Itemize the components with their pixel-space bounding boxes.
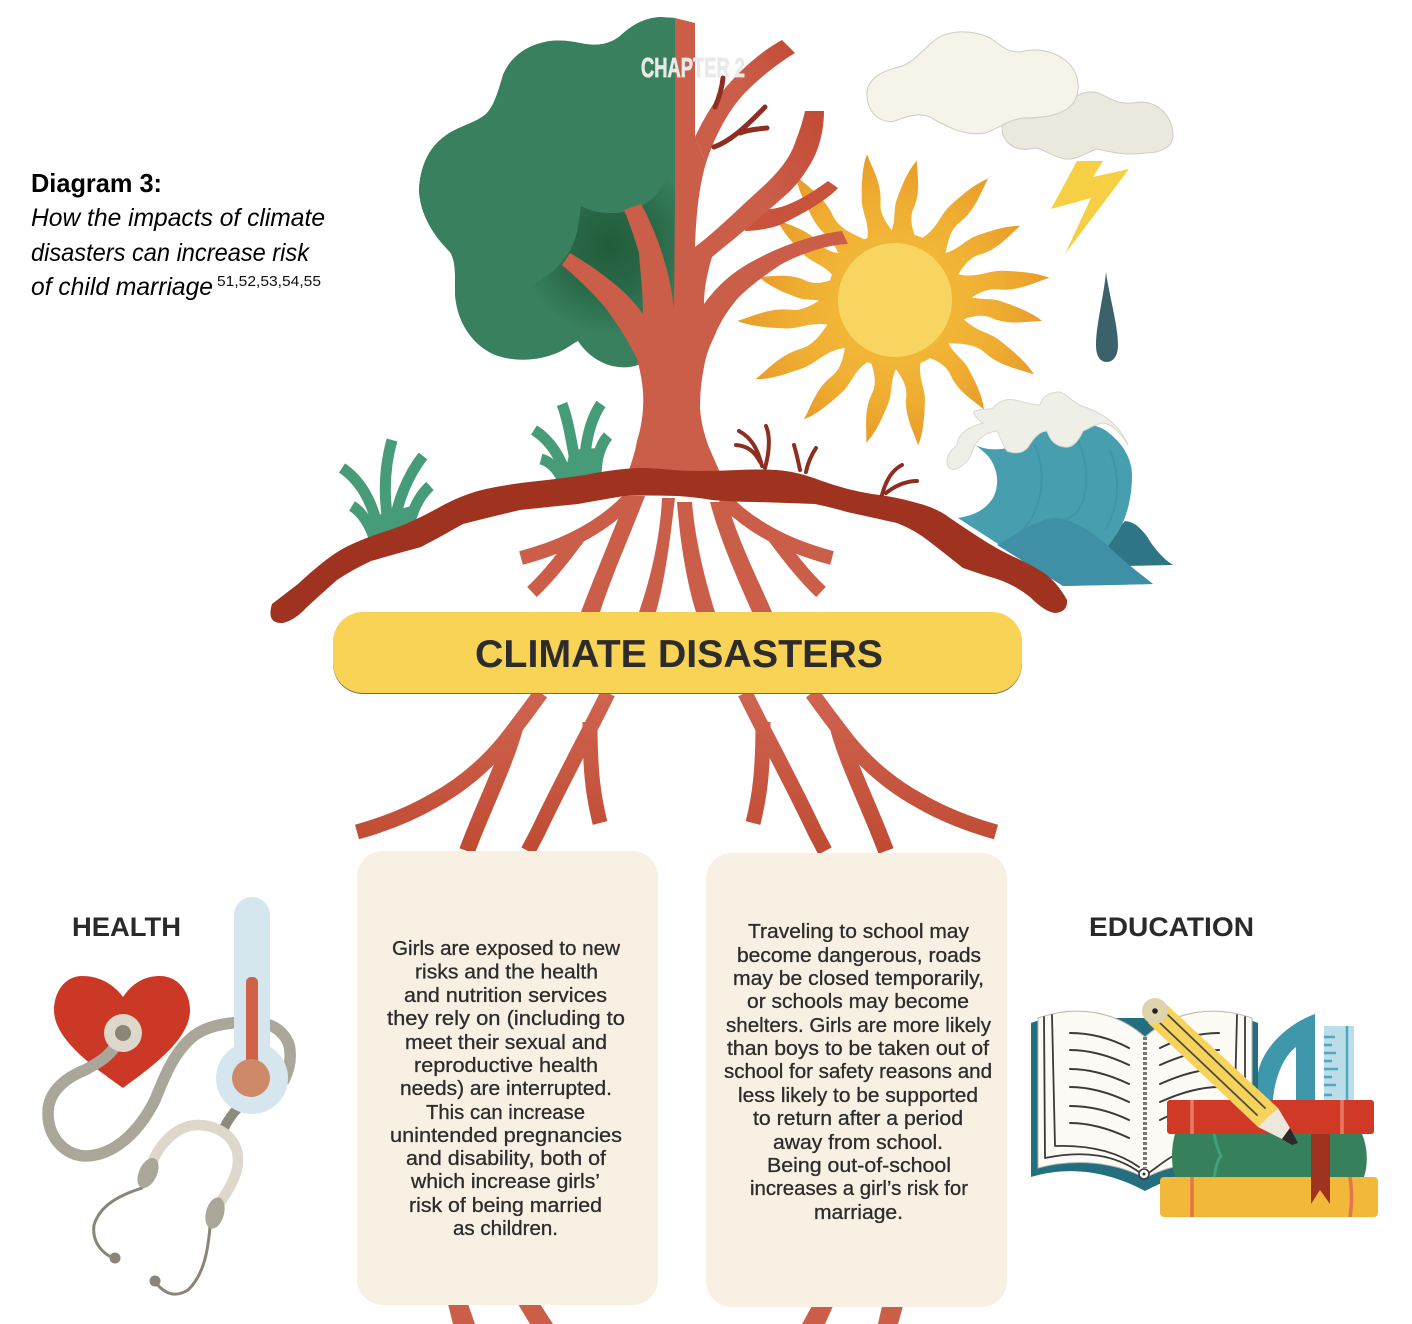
panel: education text: marriage. [814,1202,903,1224]
bottom root stubs [448,1304,903,1324]
rain drop [1096,272,1118,362]
icon: heart and stethoscope with thermometer [48,897,290,1294]
title block [31,168,325,301]
title block: Diagram 3: [31,168,162,198]
panel: health text: they rely on (including to [387,1008,625,1030]
title block: of child marriage [31,273,213,301]
chapter label: CHAPTER 2 [641,52,745,83]
panel: health text: unintended pregnancies [390,1125,622,1147]
panel: health text: This can increase [426,1102,585,1124]
panel: education text: to return after a period [753,1108,963,1130]
panel: health text: and disability, both of [406,1148,606,1170]
icon: books, pencil and geometry tools [1031,998,1378,1217]
panel: education text: shelters. Girls are more likely [726,1015,991,1037]
panel: health text: risks and the health [415,962,598,984]
panel: health text: Girls are exposed to new [392,938,621,960]
panel: education text: away from school. [773,1132,943,1154]
panel: health text: as children. [453,1218,558,1240]
title block: How the impacts of climate [31,204,325,232]
tree canopy [419,17,675,367]
panel: education text: or schools may become [747,991,969,1013]
roots below banner [357,693,996,851]
panel: health text: and nutrition services [404,985,607,1007]
panel: education text: increases a girl’s risk for [750,1178,968,1200]
grass tufts [342,404,608,540]
panel: health text: meet their sexual and [405,1032,607,1054]
banner: climate disasters: CLIMATE DISASTERS [475,633,883,676]
panel: health text: risk of being married [409,1195,602,1217]
tree trunk and branches [562,18,848,475]
heading: health: HEALTH [72,912,181,942]
wave [947,392,1173,586]
title block: 51,52,53,54,55 [217,274,321,290]
panel: education text: less likely to be supported [738,1085,978,1107]
panel: education text: become dangerous, roads [737,945,981,967]
dry twigs on ground [736,426,917,495]
title block: disasters can increase risk [31,239,310,267]
panel: education text: may be closed temporarily, [733,968,984,990]
panel: education text: Being out-of-school [767,1155,951,1177]
sun [735,151,1052,448]
lightning bolt [1051,161,1129,254]
clouds [867,32,1173,159]
panel: education text: than boys to be taken out of [727,1038,989,1060]
ground [270,468,1067,623]
panel: education text [706,853,1007,1307]
panel: health text: needs) are interrupted. [400,1078,612,1100]
panel: education text: Traveling to school may [748,921,969,943]
panel: health text [357,851,658,1305]
panel: education text: school for safety reasons and [724,1061,992,1083]
panel: health text: which increase girls’ [410,1171,600,1193]
heading: education: EDUCATION [1089,912,1254,942]
banner: climate disasters [333,612,1022,694]
panel: health text: reproductive health [414,1055,598,1077]
roots above banner [521,496,832,612]
